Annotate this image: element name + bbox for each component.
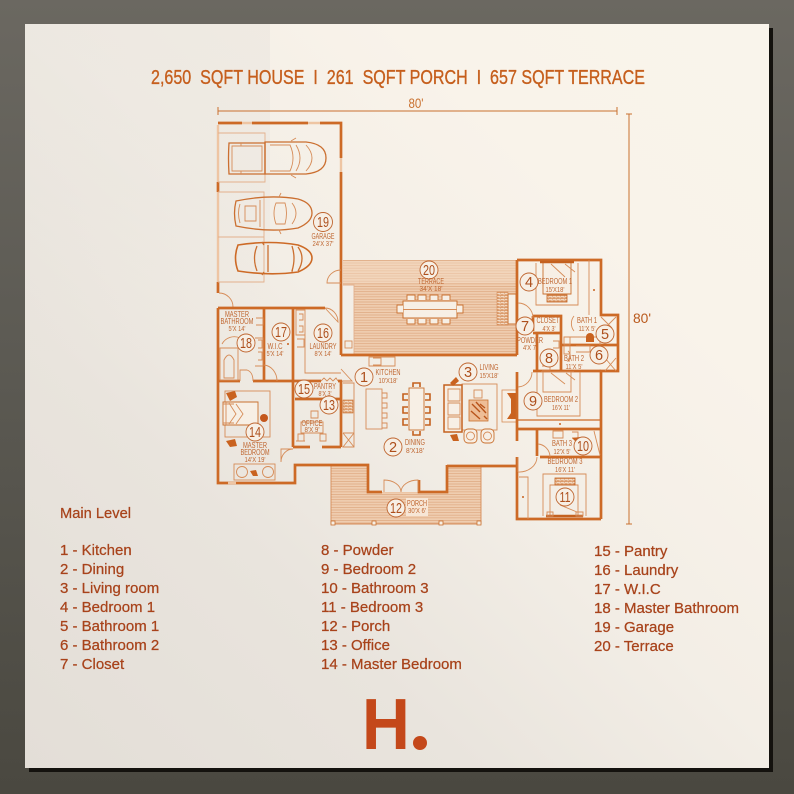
dining table [403,383,430,435]
terrace label: 20 [423,263,435,279]
garage label: GARAGE [312,232,334,241]
bedroom 1 label: BEDROOM 1 [538,277,572,286]
master bathroom label: MASTER [225,310,249,319]
legend column 2: 13 - Office [321,637,390,654]
master bedroom [218,381,382,492]
powder: POWDER [517,336,543,345]
laundry: 16 [317,326,329,342]
outdoor fireplace [497,292,516,325]
terrace label: 34'X 18' [420,286,442,293]
kitchen counter and sink [369,357,395,366]
bedroom 2 label [524,392,578,412]
dining label: 2 [389,440,397,456]
garage label: 19 [317,215,329,231]
pickup truck [228,138,326,178]
bathroom 1: BATH 1 [577,316,597,325]
legend column 1: 4 - Bedroom 1 [60,599,155,616]
bedroom 3 label: 11 [560,490,570,506]
living room [444,363,517,443]
legend column 1: 5 - Bathroom 1 [60,618,159,635]
width dimension 80 feet [218,95,617,115]
bathroom 1: 11'X 5' [578,326,596,333]
porch wall notch [419,465,447,492]
legend column 3: 17 - W.I.C [594,581,661,598]
depth dimension 80 feet: 80' [633,310,651,326]
master bedroom label: 14'X 19' [244,457,266,464]
bedroom 1 label: 15'X18' [546,287,564,294]
bedroom 1 label [520,273,572,294]
legend column 3: 20 - Terrace [594,638,674,655]
legend column 2: 8 - Powder [321,542,394,559]
entry double doors [384,480,418,492]
bathroom 2: BATH 2 [564,354,584,363]
fireplace [502,390,517,422]
master bathroom label: 5'X 14' [228,326,246,333]
legend: main level heading: Main Level [60,505,131,522]
powder [516,303,601,387]
legend column 3: 16 - Laundry [594,562,679,579]
master bedroom label: BEDROOM [240,448,270,457]
office [293,381,341,447]
bedroom 2 label: 9 [529,394,537,410]
master bed [223,402,258,425]
laundry: 8'X 14' [314,351,332,358]
SUV [234,193,312,234]
porch label [387,498,428,517]
kitchen label: KITCHEN [376,368,401,377]
sedan [236,242,312,275]
terrace dining table [397,295,463,324]
bedroom 1 [447,260,618,519]
master bathroom label: BATHROOM [220,317,254,326]
laundry [293,308,352,447]
bathroom 3: 12'X 5' [554,449,570,456]
living label: 15'X18' [480,373,498,380]
bathroom 2 [564,346,616,371]
living label: 3 [464,365,472,381]
legend column 3: 15 - Pantry [594,543,668,560]
walk-in closet [264,323,290,381]
bed 1 [540,262,575,302]
bedroom seating [234,464,275,480]
powder: 8 [545,351,553,367]
rug [462,384,497,430]
logo: H [362,683,410,765]
legend column 2: 9 - Bedroom 2 [321,561,416,578]
kitchen island [366,389,387,429]
armchairs [464,429,494,443]
sofa [444,385,462,432]
legend column 1: 6 - Bathroom 2 [60,637,159,654]
bedroom 3 label [548,457,583,506]
legend column 1: 3 - Living room [60,580,159,597]
living label [459,363,498,381]
living label: LIVING [480,363,498,372]
floor plan [218,123,618,525]
bathroom 2: 11'X 5' [566,364,582,371]
master bathroom [218,308,325,381]
walk-in closet: 17 [275,325,287,341]
pantry: PANTRY [314,382,336,391]
garage label: 24'X 37' [312,241,334,248]
bedroom 3 [518,457,586,519]
bathroom 1: 5 [601,327,609,343]
bathroom 3 [537,430,601,457]
coffee table [469,390,488,421]
bed 2 [541,372,575,392]
title: 2,650 SQFT HOUSE I 261 SQFT PORCH I 657 SQFT TERRACE [151,67,645,89]
bed 3 [546,478,583,516]
bedroom 1 label: 4 [525,275,533,291]
pantry: 8'X 3' [318,391,332,398]
dining label: 8'X18' [406,448,424,455]
kitchen label: 1 [360,370,368,386]
bedroom 2 label: 16'X 11' [552,405,570,412]
depth dimension 80 feet [626,114,651,524]
closet: CLOSET [536,316,560,325]
walk-in closet: 5'X 14' [266,351,284,358]
powder: 7 [521,319,529,335]
bathroom 3: 10 [577,439,589,455]
terrace label [418,261,444,293]
pantry [293,378,342,399]
porch [331,465,481,525]
bathroom 3: BATH 3 [552,439,572,448]
bedroom 3 label: 16'X 11' [555,467,575,474]
terrace [343,260,517,355]
legend column 1: 7 - Closet [60,656,125,673]
powder: 4'X 7' [523,345,537,352]
office: 13 [323,398,335,414]
legend column 2 [321,542,462,673]
bathroom 2: 6 [595,348,603,364]
dining [384,383,430,456]
walk-in closet: W.I.C [268,342,283,351]
width dimension 80 feet: 80' [408,95,424,111]
closet: 4'X 3' [542,326,556,333]
bedroom 2 [517,372,601,429]
legend column 2: 10 - Bathroom 3 [321,580,429,597]
legend column 1: 2 - Dining [60,561,124,578]
dining label: DINING [405,438,425,447]
legend column 2: 11 - Bedroom 3 [321,599,423,616]
master bathroom label: 18 [240,336,252,352]
legend column 1: 1 - Kitchen [60,542,132,559]
bedroom 2 label: BEDROOM 2 [544,395,578,404]
kitchen [341,355,517,447]
master bedroom label: MASTER [243,441,267,450]
master bedroom label [240,423,270,464]
office: 8'X 9' [304,427,320,434]
legend column 3: 18 - Master Bathroom [594,600,739,617]
garage [218,123,341,355]
master bedroom label: 14 [249,425,261,441]
legend column 1 [60,542,159,673]
kitchen label [355,368,401,386]
pantry: 15 [298,382,310,398]
master bathroom label [220,310,255,352]
terrace label: TERRACE [418,277,444,286]
porch label: 30'X 6' [408,508,426,515]
laundry: LAUNDRY [310,342,337,351]
porch label: PORCH [407,499,427,508]
office: OFFICE [302,419,322,428]
closet [533,316,561,371]
legend column 2: 12 - Porch [321,618,390,635]
garage label [312,212,334,248]
legend column 3: 19 - Garage [594,619,674,636]
legend column 3 [594,543,739,655]
dining label [384,438,425,456]
porch label: 12 [390,501,402,517]
legend column 2: 14 - Master Bedroom [321,656,462,673]
bathroom 1 [561,316,618,345]
kitchen label: 10'X18' [378,378,398,385]
bathtub [220,348,238,380]
bedroom 3 label: BEDROOM 3 [548,457,583,466]
